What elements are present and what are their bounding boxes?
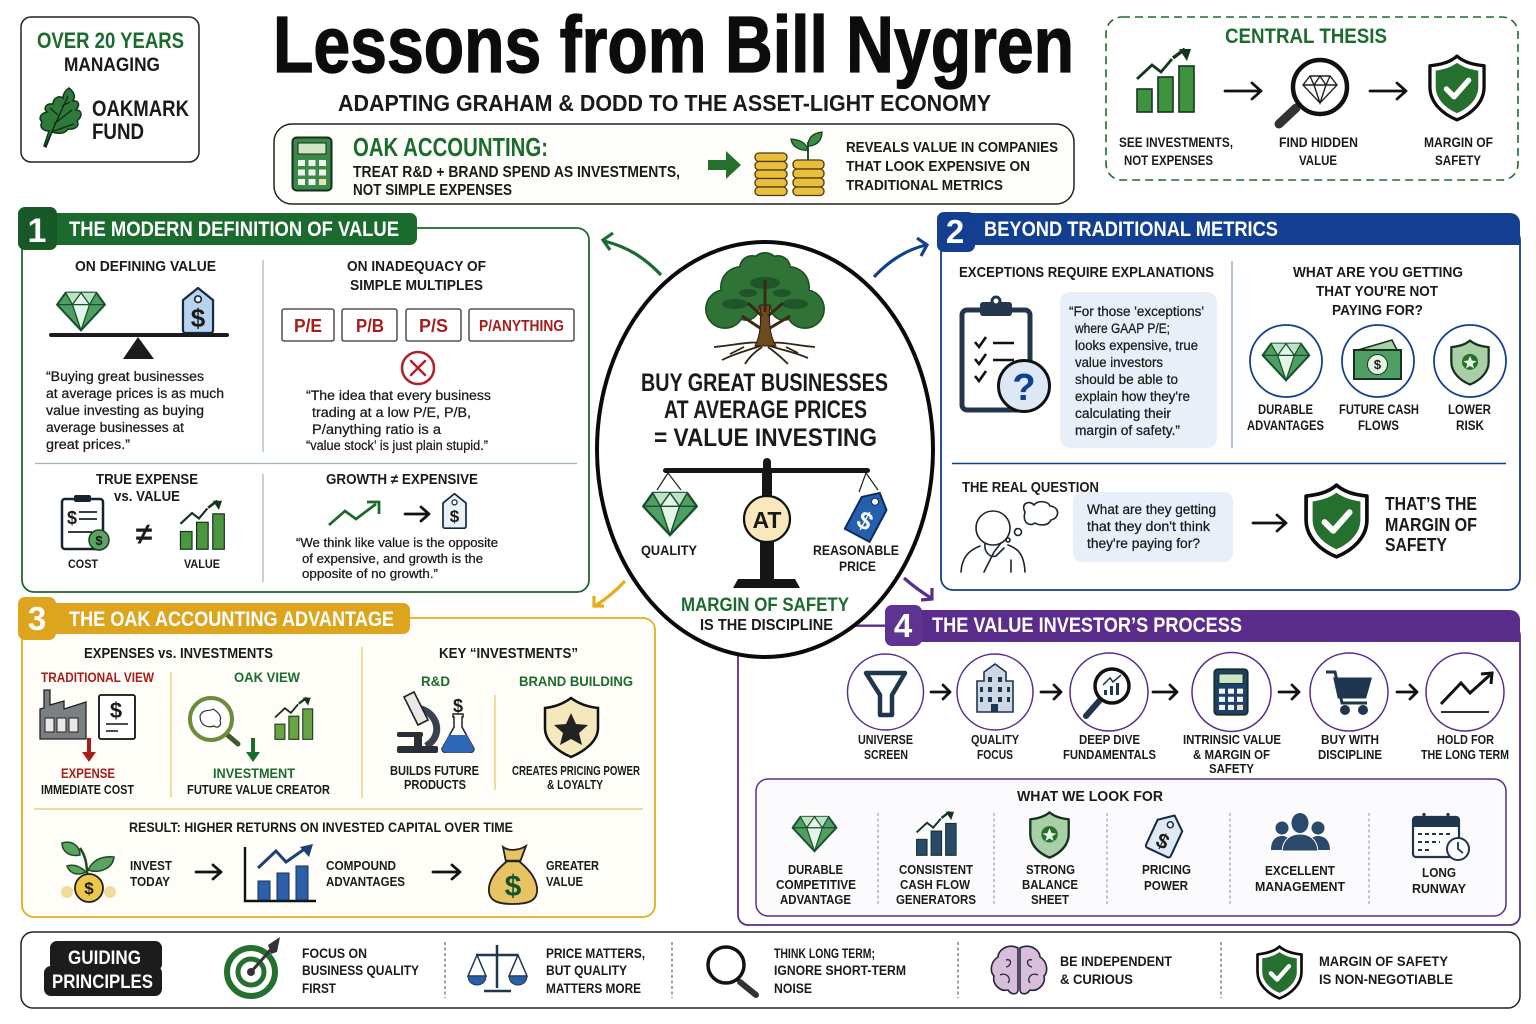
quote: simple multiples: “The idea that every business	[306, 388, 491, 403]
panel: oak accounting: TRADITIONAL METRICS	[846, 177, 1003, 194]
icon circles: what you get: RISK	[1456, 418, 1484, 433]
panel 3: the oak accounting advantage: BRAND BUILDING	[519, 673, 633, 689]
quote: simple multiples	[306, 388, 491, 453]
icon: price tag	[443, 494, 466, 528]
panel: guiding principles: IGNORE SHORT-TERM	[774, 963, 906, 978]
icon: microscope and flask: $	[453, 696, 463, 716]
icon: long term growth line	[1441, 673, 1492, 712]
quote: exceptions: should be able to	[1075, 372, 1178, 387]
panel 1: the modern definition of value: ON INADEQUACY OF	[347, 258, 486, 275]
panel: guiding principles: & CURIOUS	[1060, 972, 1133, 987]
panel 2: beyond traditional metrics: WHAT ARE YOU GETTING	[1293, 264, 1463, 281]
central oval: core philosophy: QUALITY	[641, 543, 697, 558]
icon: growth chart	[275, 698, 313, 739]
panel 3: the oak accounting advantage: IMMEDIATE COST	[41, 783, 134, 797]
panel 3: the oak accounting advantage: EXPENSE	[61, 766, 115, 781]
panel 2: beyond traditional metrics	[937, 212, 1520, 590]
icon: magnifier on oak leaf	[190, 698, 238, 744]
panel 3: the oak accounting advantage: & LOYALTY	[547, 778, 604, 792]
header: section 4: THE VALUE INVESTOR’S PROCESS	[932, 614, 1242, 637]
header: section 2	[937, 212, 1520, 252]
panel: central thesis	[1106, 17, 1518, 180]
panel 3: the oak accounting advantage: ADVANTAGES	[326, 874, 405, 889]
quote: simple multiples: trading at a low P/E, P/B,	[312, 405, 471, 420]
panel 1: the modern definition of value: GROWTH ≠ EXPENSIVE	[326, 472, 478, 488]
process labels: FUNDAMENTALS	[1063, 748, 1156, 762]
panel 3: the oak accounting advantage: COMPOUND	[326, 858, 396, 873]
process labels: SCREEN	[864, 748, 908, 762]
quote: exceptions: value investors	[1075, 355, 1163, 370]
icon: funnel	[866, 673, 905, 715]
header: section 3: 3	[28, 600, 46, 637]
panel: guiding principles: MARGIN OF SAFETY	[1319, 954, 1448, 969]
quote: exceptions: explain how they're	[1075, 389, 1190, 404]
panel 3: the oak accounting advantage	[18, 597, 655, 917]
icon: shield	[1258, 947, 1302, 998]
panel: what we look for: LONG	[1422, 866, 1456, 880]
quote: buying great businesses: great prices.”	[46, 437, 130, 452]
panel: what we look for: COMPETITIVE	[776, 878, 856, 892]
multiples boxes: P/S	[419, 316, 448, 336]
panel: what we look for: PRICING	[1142, 863, 1191, 877]
icon circles: what you get	[1247, 325, 1506, 433]
badge: over 20 years managing Oakmark Fund	[21, 17, 199, 162]
icon: clipboard with question mark	[962, 297, 1050, 412]
icon: target	[227, 937, 280, 996]
badge: over 20 years managing Oakmark Fund: OVER 20 YEARS	[37, 28, 184, 53]
panel: guiding principles: BE INDEPENDENT	[1060, 954, 1173, 969]
icon: thinking person	[961, 502, 1058, 572]
panel: central thesis: CENTRAL THESIS	[1225, 25, 1387, 48]
panel 2: beyond traditional metrics: THAT’S THE	[1385, 494, 1477, 514]
panel: guiding principles: BUSINESS QUALITY	[302, 963, 419, 978]
icon: clipboard with question mark: ?	[1012, 367, 1036, 409]
header: section 3: THE OAK ACCOUNTING ADVANTAGE	[69, 608, 394, 631]
icon: sprout with coin	[61, 842, 116, 902]
central oval: core philosophy: = VALUE INVESTING	[654, 424, 877, 452]
panel: guiding principles: PRICE MATTERS,	[546, 946, 645, 961]
icon: compounding chart	[245, 844, 316, 901]
process arrows	[931, 685, 1417, 699]
panel: oak accounting	[274, 124, 1074, 204]
process labels	[858, 733, 1509, 776]
quote: buying great businesses: value investing as buying	[46, 403, 204, 418]
panel 2: beyond traditional metrics: THAT YOU'RE NOT	[1316, 283, 1438, 300]
icon circles: what you get: FLOWS	[1358, 418, 1399, 433]
process step circles	[848, 652, 1504, 732]
panel: central thesis: MARGIN OF	[1424, 134, 1493, 150]
badge: over 20 years managing Oakmark Fund: OAKMARK	[92, 96, 189, 121]
panel: what we look for: RUNWAY	[1412, 882, 1467, 896]
icon: scales	[468, 945, 527, 991]
badge: guiding principles: PRINCIPLES	[52, 972, 153, 993]
panel 1: the modern definition of value: $	[450, 507, 460, 526]
panel: what we look for: BALANCE	[1022, 878, 1078, 892]
icon circles: what you get: DURABLE	[1258, 402, 1313, 417]
panel: what we look for: EXCELLENT	[1265, 864, 1335, 878]
panel: what we look for: CASH FLOW	[900, 878, 970, 892]
process labels: UNIVERSE	[858, 733, 913, 747]
icon: factory and invoice	[40, 690, 135, 739]
arrow	[1225, 83, 1261, 99]
icon circles: what you get: ADVANTAGES	[1247, 418, 1324, 433]
icon: pricing tag: $	[1152, 829, 1173, 855]
panel 3: the oak accounting advantage: PRODUCTS	[404, 778, 466, 792]
header: section 1	[18, 207, 417, 250]
arrow	[1370, 83, 1406, 99]
icon: pricing tag	[1145, 810, 1187, 858]
quote: buying great businesses: at average prices is as much	[46, 386, 224, 401]
icon: shopping cart	[1326, 672, 1370, 714]
icon circles: what you get: $	[1374, 357, 1382, 372]
quote: buying great businesses: average businesses at	[46, 420, 184, 435]
icon: office building	[977, 664, 1013, 712]
icon: sprout with coin: $	[84, 879, 94, 898]
panel: central thesis: SAFETY	[1435, 152, 1482, 168]
quote: growth	[296, 536, 498, 581]
panel 3: the oak accounting advantage: GREATER	[546, 858, 600, 873]
panel 1: the modern definition of value: vs. VALUE	[114, 489, 180, 505]
panel 1: the modern definition of value: ≠	[136, 518, 153, 551]
panel: central thesis: SEE INVESTMENTS,	[1119, 134, 1233, 150]
process labels: FOCUS	[977, 748, 1013, 762]
icon: cost clipboard	[62, 495, 109, 550]
arrow	[433, 865, 460, 879]
process labels: THE LONG TERM	[1421, 748, 1509, 762]
panel 3: the oak accounting advantage: EXPENSES vs. INVESTMENTS	[84, 646, 273, 662]
icon: balance of diamond and price tag: $	[191, 303, 206, 333]
quote: exceptions: where GAAP P/E;	[1074, 321, 1170, 336]
panel 3: the oak accounting advantage: OAK VIEW	[234, 670, 300, 685]
panel: guiding principles: IS NON-NEGOTIABLE	[1319, 972, 1453, 987]
quote: exceptions: “For those 'exceptions'	[1069, 304, 1204, 319]
header: section 4	[858, 605, 1520, 646]
panel: what we look for: SHEET	[1031, 893, 1069, 907]
header: section 2: BEYOND TRADITIONAL METRICS	[984, 218, 1278, 241]
header: section 3	[18, 597, 410, 640]
icon: money bag: $	[505, 870, 522, 903]
panel: guiding principles: NOISE	[774, 981, 812, 996]
quote: exceptions: calculating their	[1075, 406, 1172, 421]
process labels: INTRINSIC VALUE	[1183, 733, 1281, 747]
panel: what we look for	[756, 779, 1506, 916]
icon: red x	[402, 352, 434, 384]
icon: cost clipboard: $	[67, 508, 77, 528]
quote: growth: opposite of no growth.”	[302, 567, 438, 581]
icon: magnifier	[708, 947, 756, 995]
panel 1: the modern definition of value: VALUE	[184, 557, 220, 571]
title: Lessons from Bill Nygren	[273, 0, 1074, 89]
panel: central thesis: FIND HIDDEN	[1279, 134, 1358, 150]
panel: guiding principles: FIRST	[302, 981, 337, 996]
icon: balance scale: $	[852, 506, 878, 537]
central oval: core philosophy	[597, 242, 933, 657]
quote: exceptions	[1060, 292, 1217, 448]
badge: over 20 years managing Oakmark Fund: MANAGING	[64, 55, 160, 76]
panel 1: the modern definition of value: ON DEFINING VALUE	[75, 258, 216, 275]
subtitle: ADAPTING GRAHAM & DODD TO THE ASSET-LIGHT ECONOMY	[338, 90, 991, 116]
icon: cost clipboard: $	[95, 533, 103, 548]
icon: brain	[991, 946, 1047, 994]
central oval: core philosophy: PRICE	[839, 559, 876, 574]
header: section 4: 4	[894, 607, 913, 644]
icon: brand shield with star	[545, 698, 598, 757]
icon: calendar with clock	[1413, 813, 1469, 860]
panel: guiding principles: FOCUS ON	[302, 946, 367, 961]
icon: oak leaf	[40, 88, 81, 147]
panel 1: the modern definition of value: COST	[68, 557, 99, 571]
icon: management people	[1271, 813, 1330, 851]
panel: what we look for: POWER	[1144, 879, 1188, 893]
panel: what we look for: GENERATORS	[896, 893, 976, 907]
panel 3: the oak accounting advantage: INVESTMENT	[213, 766, 296, 781]
panel 3: the oak accounting advantage: CREATES PRICING POWER	[512, 764, 640, 778]
panel 3: the oak accounting advantage: BUILDS FUTURE	[390, 764, 479, 778]
panel 3: the oak accounting advantage: INVEST	[130, 858, 172, 873]
process labels: SAFETY	[1209, 762, 1255, 776]
panel: oak accounting: THAT LOOK EXPENSIVE ON	[846, 158, 1030, 175]
multiples boxes: P/ANYTHING	[479, 318, 564, 335]
badge: guiding principles: GUIDING	[68, 948, 141, 969]
panel 3: the oak accounting advantage: TODAY	[130, 874, 170, 889]
panel: what we look for: DURABLE	[788, 863, 843, 877]
process labels: & MARGIN OF	[1193, 748, 1270, 762]
process labels: BUY WITH	[1321, 733, 1379, 747]
process labels: HOLD FOR	[1437, 733, 1494, 747]
icon: calculator	[292, 138, 332, 190]
panel: guiding principles: THINK LONG TERM;	[774, 946, 875, 961]
icon: shield	[1306, 485, 1367, 557]
icon: shield	[1430, 56, 1484, 120]
panel: what we look for: WHAT WE LOOK FOR	[1017, 788, 1163, 805]
central oval: core philosophy: BUY GREAT BUSINESSES	[641, 369, 888, 397]
panel: what we look for: CONSISTENT	[899, 863, 973, 877]
panel: central thesis: NOT EXPENSES	[1124, 152, 1213, 168]
quote: real question: they're paying for?	[1087, 536, 1200, 551]
panel: guiding principles	[21, 932, 1520, 1008]
panel 2: beyond traditional metrics: MARGIN OF	[1385, 515, 1477, 535]
icon circles: what you get: FUTURE CASH	[1339, 402, 1419, 417]
quote: exceptions: looks expensive, true	[1075, 338, 1198, 353]
process labels: QUALITY	[971, 733, 1020, 747]
icon: calculator	[1214, 669, 1248, 715]
arrow: expense	[82, 738, 96, 762]
process labels: DEEP DIVE	[1079, 733, 1140, 747]
quote: exceptions: margin of safety.”	[1075, 423, 1180, 438]
quote: real question: What are they getting	[1087, 502, 1216, 517]
panel: what we look for: STRONG	[1026, 863, 1075, 877]
header: section 1: THE MODERN DEFINITION OF VALUE	[69, 218, 399, 241]
quote: growth: “We think like value is the opposite	[296, 536, 498, 550]
central oval: core philosophy: REASONABLE	[813, 543, 899, 558]
panel 3: the oak accounting advantage: VALUE	[546, 874, 583, 889]
icon: balance of diamond and price tag	[49, 288, 229, 359]
arrow: to section 2	[874, 238, 927, 277]
panel 1: the modern definition of value: SIMPLE MULTIPLES	[350, 277, 483, 294]
quote: real question	[1073, 492, 1233, 562]
icon: coins and sprout	[755, 132, 824, 196]
panel: guiding principles: BUT QUALITY	[546, 963, 627, 978]
icon: growth arrow	[329, 502, 379, 525]
panel 3: the oak accounting advantage: R&D	[421, 673, 450, 689]
icon: oak tree	[705, 252, 825, 364]
quote: growth: of expensive, and growth is the	[302, 552, 483, 566]
panel 1: the modern definition of value: TRUE EXPENSE	[96, 472, 198, 488]
arrow	[196, 865, 221, 879]
panel: central thesis: VALUE	[1299, 152, 1337, 168]
icon: microscope and flask	[397, 692, 474, 753]
arrow: to section 4	[904, 578, 932, 600]
process labels: DISCIPLINE	[1318, 748, 1382, 762]
panel: what we look for: ADVANTAGE	[780, 893, 851, 907]
panel 3: the oak accounting advantage: KEY “INVESTMENTS”	[439, 646, 578, 662]
panel: oak accounting: OAK ACCOUNTING:	[353, 132, 548, 162]
central oval: core philosophy: IS THE DISCIPLINE	[700, 617, 833, 634]
multiples boxes: P/B	[356, 316, 384, 336]
icon: money bag	[489, 846, 537, 904]
icon: balance scale	[643, 458, 892, 588]
panel 3: the oak accounting advantage: TRADITIONAL VIEW	[41, 670, 154, 685]
icon: factory and invoice: $	[110, 698, 122, 723]
multiples boxes	[282, 309, 574, 341]
arrow: accounting to value	[708, 151, 741, 179]
central oval: core philosophy: MARGIN OF SAFETY	[681, 595, 849, 616]
quote: buying great businesses: “Buying great businesses	[46, 369, 204, 384]
quote: buying great businesses	[46, 369, 224, 452]
icon: balance scale: AT	[753, 507, 781, 533]
panel 2: beyond traditional metrics: THE REAL QUESTION	[962, 479, 1099, 496]
panel: what we look for: MANAGEMENT	[1255, 880, 1345, 894]
panel 1: the modern definition of value	[18, 207, 589, 592]
header: section 2: 2	[946, 213, 964, 250]
badge: guiding principles	[44, 941, 162, 996]
quote: simple multiples: P/anything ratio is a	[312, 422, 442, 437]
quote: simple multiples: “value stock’ is just plain stupid.”	[306, 438, 488, 453]
icon: magnifier with diamond	[1279, 60, 1347, 124]
header: section 1: 1	[28, 212, 46, 250]
panel: oak accounting: NOT SIMPLE EXPENSES	[353, 182, 512, 199]
panel: oak accounting: REVEALS VALUE IN COMPANIES	[846, 139, 1058, 156]
badge: over 20 years managing Oakmark Fund: FUND	[92, 119, 144, 144]
multiples boxes: P/E	[294, 316, 322, 336]
arrow	[1253, 515, 1286, 531]
panel: guiding principles: MATTERS MORE	[546, 981, 641, 996]
icon circles: what you get: LOWER	[1448, 402, 1491, 417]
arrow	[405, 507, 429, 521]
panel 3: the oak accounting advantage: RESULT: HIGHER RETURNS ON INVESTED CAPITAL OVER TIME	[129, 819, 513, 835]
panel: oak accounting: TREAT R&D + BRAND SPEND AS INVESTMENTS,	[353, 164, 680, 181]
panel 2: beyond traditional metrics: SAFETY	[1385, 535, 1447, 555]
panel 2: beyond traditional metrics: PAYING FOR?	[1332, 302, 1423, 319]
central oval: core philosophy: AT AVERAGE PRICES	[664, 396, 867, 424]
panel 2: beyond traditional metrics: EXCEPTIONS REQUIRE EXPLANATIONS	[959, 264, 1214, 281]
icon: growth chart	[1137, 49, 1194, 112]
icon: value chart	[180, 501, 224, 549]
panel 4: the value investor's process	[738, 626, 1520, 925]
panel 3: the oak accounting advantage: FUTURE VALUE CREATOR	[187, 783, 330, 797]
icon: magnifier with chart	[1086, 669, 1129, 716]
quote: real question: that they don't think	[1087, 519, 1210, 534]
arrow: to section 1	[603, 233, 661, 275]
arrow: to section 3	[594, 581, 625, 606]
arrow: investment	[246, 738, 260, 762]
